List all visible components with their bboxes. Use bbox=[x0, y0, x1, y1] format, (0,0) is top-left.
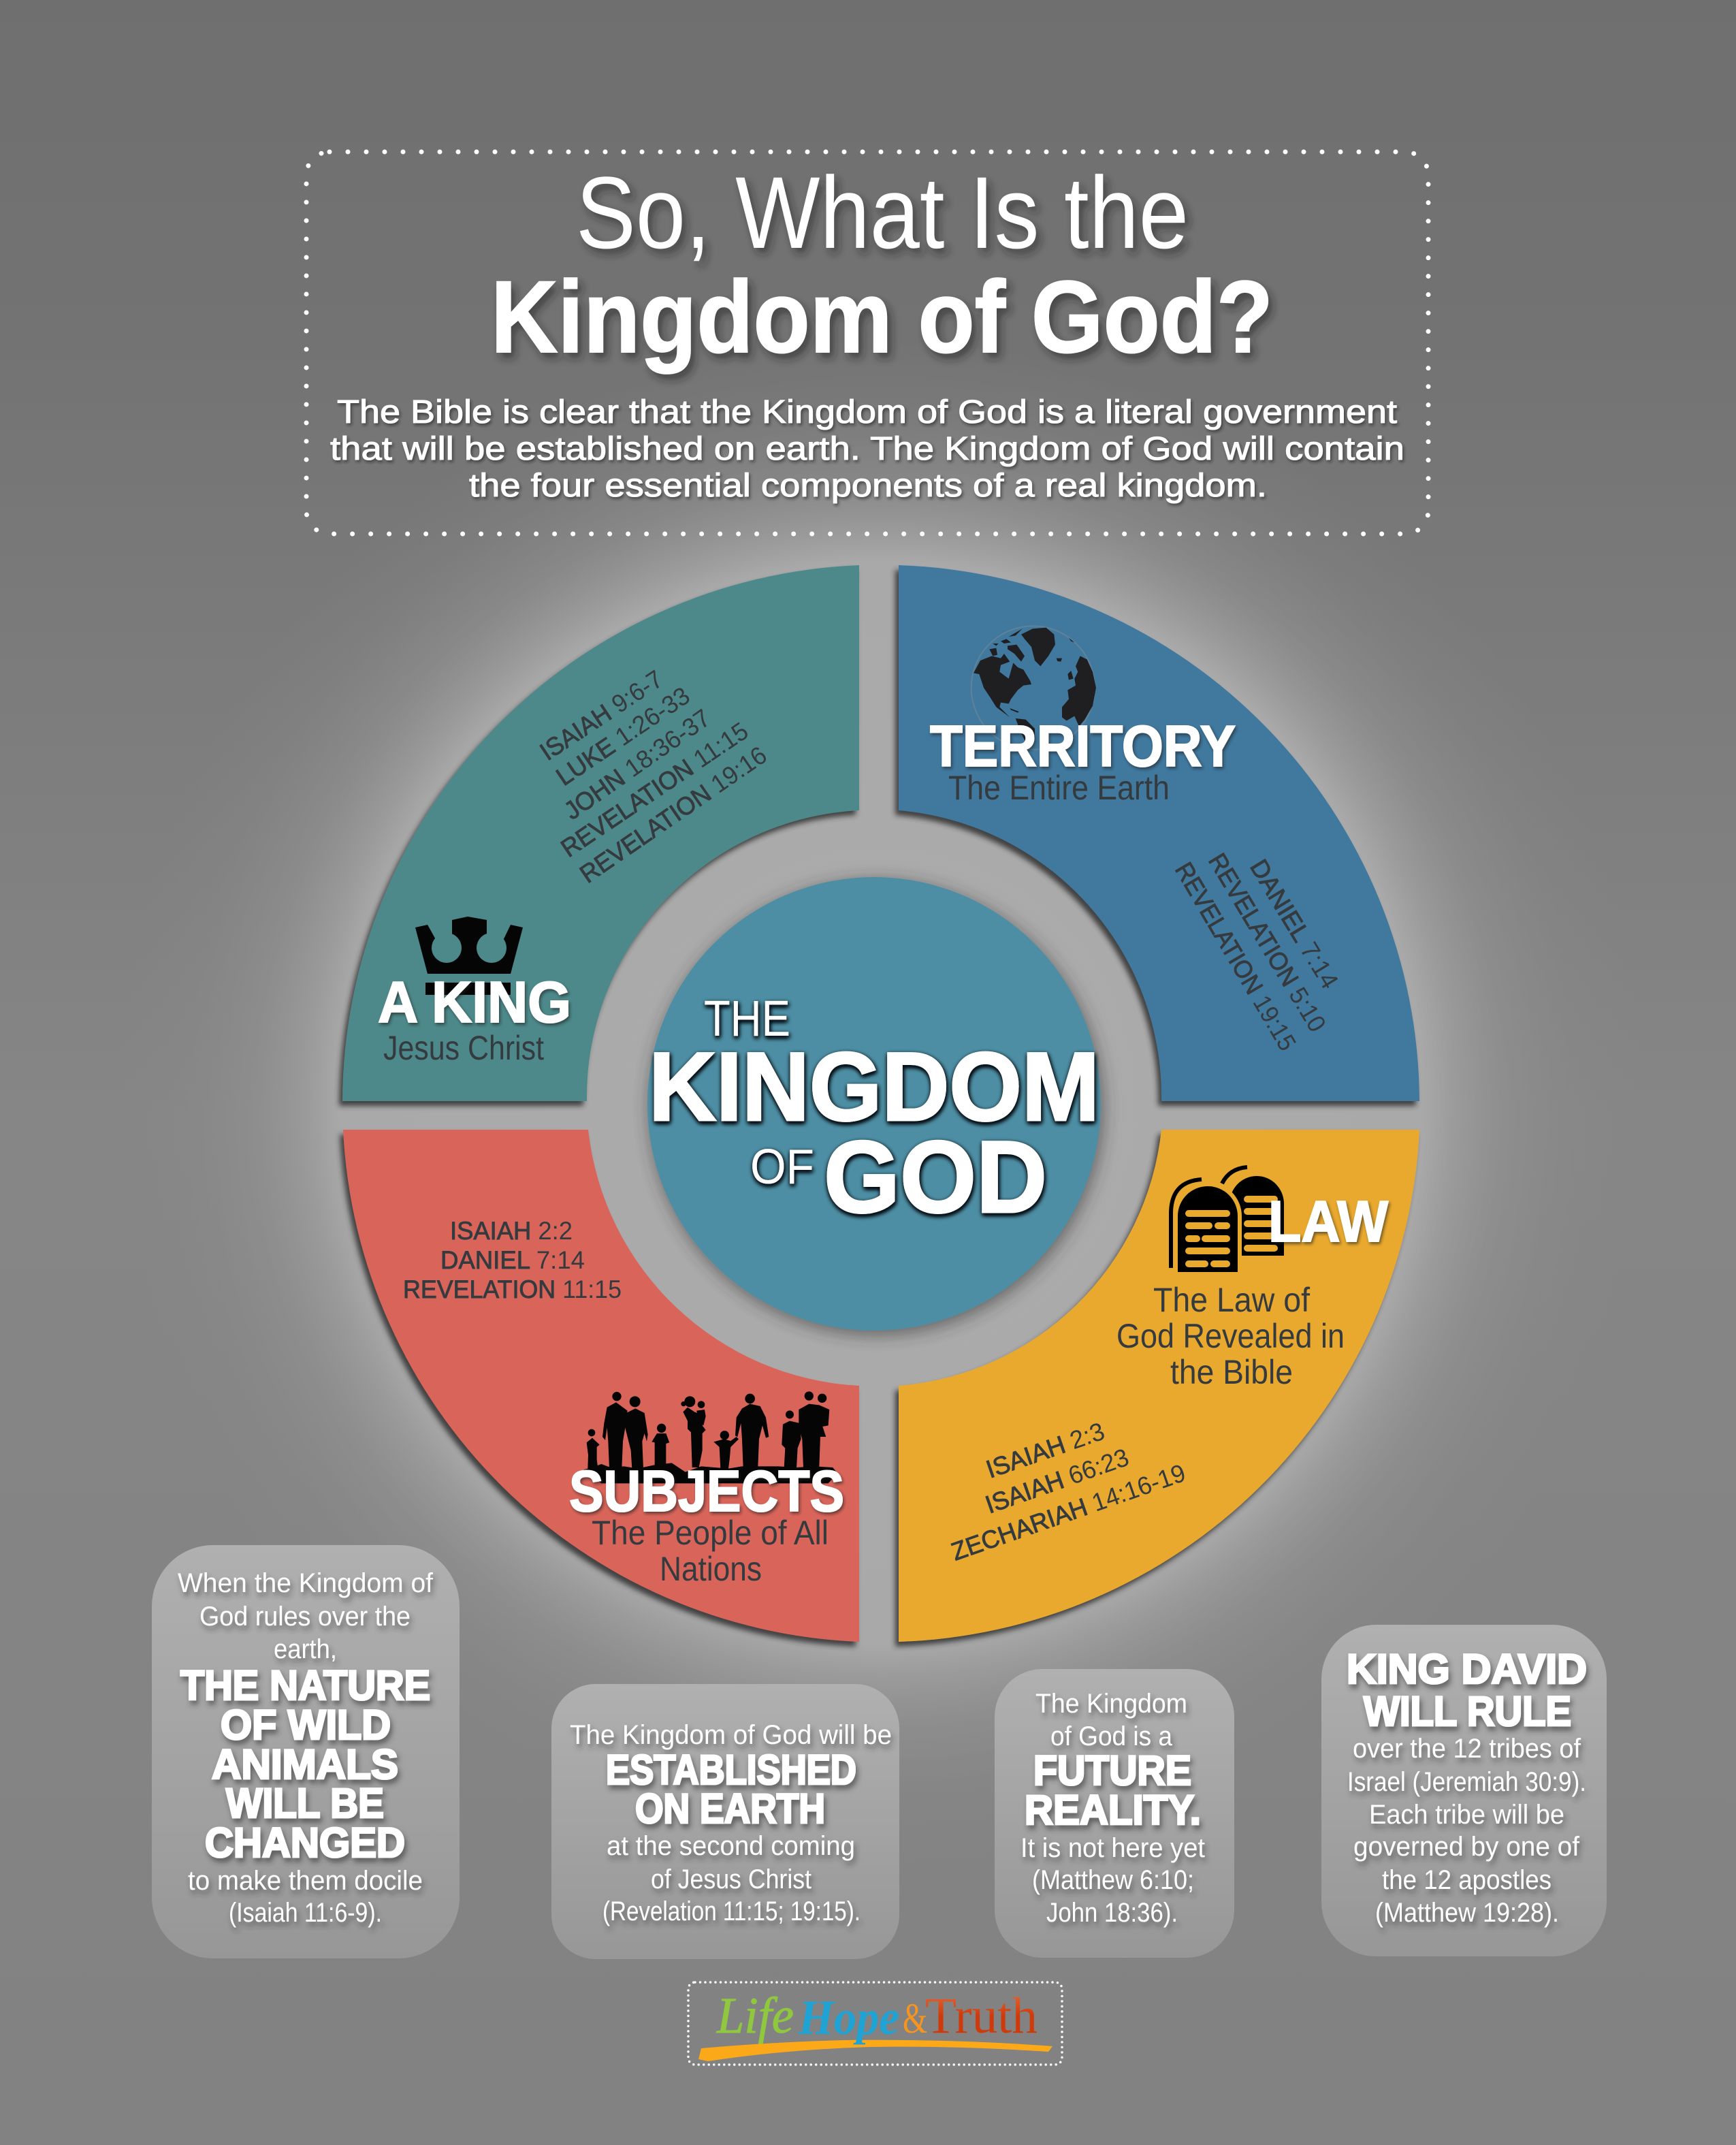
callout: king david bbox=[1321, 1625, 1607, 1956]
gold quadrant bbox=[899, 1130, 1419, 1642]
callout text: THE NATURE bbox=[180, 1662, 430, 1709]
callout text: governed by one of bbox=[1353, 1832, 1580, 1862]
callout text: Israel (Jeremiah 30:9). bbox=[1347, 1767, 1586, 1797]
intro text: that will be established on earth. The Kingdom of God will contain bbox=[330, 431, 1404, 467]
dotted frame bbox=[306, 152, 1428, 534]
icon: crown bbox=[415, 917, 523, 995]
callout text: the 12 apostles bbox=[1382, 1865, 1552, 1895]
scripture references: territory: REVELATION 19:15 bbox=[1170, 857, 1302, 1055]
callout text: God rules over the bbox=[199, 1602, 411, 1632]
callout text: (Revelation 11:15; 19:15). bbox=[602, 1896, 861, 1926]
scripture references: subjects: DANIEL 7:14 bbox=[440, 1246, 585, 1274]
callout text: earth, bbox=[274, 1634, 337, 1664]
scripture references: law: ISAIAH 66:23 bbox=[982, 1443, 1132, 1519]
callout text: FUTURE bbox=[1033, 1747, 1191, 1794]
callout text: It is not here yet bbox=[1020, 1833, 1205, 1863]
subheading: jesus christ: Jesus Christ bbox=[383, 1029, 544, 1067]
callout text bbox=[178, 1568, 434, 1928]
callout text: to make them docile bbox=[188, 1866, 423, 1896]
subheading: the people of all nations: The People of All bbox=[592, 1514, 829, 1552]
brush stroke bbox=[698, 2040, 1052, 2061]
scripture references: law: ZECHARIAH 14:16-19 bbox=[948, 1459, 1189, 1566]
callout text: Each tribe will be bbox=[1369, 1800, 1564, 1830]
center disc bbox=[647, 877, 1101, 1331]
callout: established on earth bbox=[551, 1684, 899, 1959]
callout text: (Matthew 6:10; bbox=[1032, 1865, 1194, 1895]
heading: territory: TERRITORY bbox=[930, 714, 1236, 779]
callout text: The Kingdom of God will be bbox=[570, 1720, 892, 1750]
callout text: at the second coming bbox=[607, 1831, 855, 1861]
callout text: ESTABLISHED bbox=[606, 1747, 856, 1793]
center title: GOD bbox=[824, 1119, 1047, 1234]
scripture references: subjects: REVELATION 11:15 bbox=[403, 1275, 622, 1303]
subheading: the law of god: God Revealed in bbox=[1116, 1317, 1345, 1355]
intro text: the four essential components of a real kingdom. bbox=[469, 468, 1267, 504]
scripture references: king bbox=[535, 665, 772, 889]
callout text: KING DAVID bbox=[1347, 1646, 1587, 1692]
callout background bbox=[551, 1684, 899, 1959]
teal quadrant bbox=[342, 565, 859, 1101]
scripture references: king: REVELATION 19:16 bbox=[575, 741, 772, 889]
callout text: When the Kingdom of bbox=[178, 1568, 434, 1598]
callout: future reality bbox=[995, 1669, 1234, 1958]
callout text bbox=[570, 1720, 892, 1926]
heading: law: LAW bbox=[1268, 1190, 1389, 1254]
wordmark: Life bbox=[716, 1988, 794, 2044]
scripture references: subjects: ISAIAH 2:2 bbox=[450, 1217, 573, 1245]
callout text: CHANGED bbox=[205, 1820, 405, 1866]
callout text: over the 12 tribes of bbox=[1353, 1734, 1581, 1764]
callout background bbox=[1321, 1625, 1607, 1956]
scripture references: territory: DANIEL 7:14 bbox=[1244, 855, 1344, 994]
icon: globe bbox=[971, 626, 1096, 750]
logo: life hope and truth bbox=[688, 1982, 1062, 2065]
callout text: WILL BE bbox=[226, 1780, 384, 1826]
callout background bbox=[995, 1669, 1234, 1958]
scripture references: subjects bbox=[403, 1217, 622, 1303]
scripture references: king: ISAIAH 9:6-7 bbox=[535, 665, 668, 766]
scripture references: king: JOHN 18:36-37 bbox=[559, 703, 716, 825]
panel: territory bbox=[899, 565, 1419, 1101]
callout text: OF WILD bbox=[221, 1702, 391, 1748]
title bbox=[491, 155, 1273, 374]
wordmark: Truth bbox=[925, 1988, 1038, 2044]
callout: wild animals bbox=[152, 1545, 460, 1958]
scripture references: territory: REVELATION 5:10 bbox=[1203, 848, 1332, 1037]
panel: subjects bbox=[343, 1130, 859, 1642]
panel: a king bbox=[342, 565, 859, 1101]
subheading: the people of all nations: Nations bbox=[660, 1550, 762, 1588]
subheading: the law of god: the Bible bbox=[1170, 1353, 1293, 1391]
scripture references: king: REVELATION 11:15 bbox=[556, 717, 753, 863]
wordmark: & bbox=[903, 1996, 927, 2042]
header panel bbox=[306, 152, 1428, 534]
blue quadrant bbox=[899, 565, 1419, 1101]
panel: law bbox=[899, 1130, 1419, 1642]
subheading: the entire earth: The Entire Earth bbox=[948, 769, 1170, 807]
callout text: of Jesus Christ bbox=[651, 1864, 811, 1894]
center title bbox=[649, 990, 1099, 1234]
dotted frame bbox=[688, 1982, 1062, 2065]
icon: stone tablets bbox=[1171, 1167, 1284, 1273]
callout text bbox=[1347, 1646, 1587, 1928]
icon: people silhouettes bbox=[583, 1391, 837, 1483]
subheading: the law of god: The Law of bbox=[1153, 1281, 1310, 1319]
wordmark: Hope bbox=[798, 1990, 899, 2045]
center title: OF bbox=[750, 1140, 814, 1194]
callout text bbox=[1020, 1689, 1205, 1928]
callout text: ON EARTH bbox=[635, 1785, 825, 1832]
callout text: (Matthew 19:28). bbox=[1375, 1898, 1559, 1928]
callout text: John 18:36). bbox=[1046, 1898, 1178, 1928]
intro text: The Bible is clear that the Kingdom of God is a literal government bbox=[337, 394, 1397, 430]
scripture references: king: LUKE 1:26-33 bbox=[551, 682, 695, 791]
callout background bbox=[152, 1545, 460, 1958]
heading: a king: A KING bbox=[378, 970, 571, 1035]
callout text: REALITY. bbox=[1025, 1787, 1201, 1833]
heading: subjects: SUBJECTS bbox=[569, 1459, 844, 1524]
intro text bbox=[330, 394, 1404, 504]
center title: KINGDOM bbox=[649, 1033, 1099, 1141]
callout text: of God is a bbox=[1050, 1721, 1173, 1751]
callout text: WILL RULE bbox=[1364, 1688, 1571, 1734]
callout text: The Kingdom bbox=[1035, 1689, 1187, 1719]
scripture references: law: ISAIAH 2:3 bbox=[982, 1417, 1108, 1484]
panel: center circle bbox=[647, 877, 1101, 1331]
red quadrant bbox=[343, 1130, 859, 1642]
subheading: the people of all nations bbox=[592, 1514, 829, 1588]
center title: THE bbox=[704, 990, 790, 1047]
title: So, What Is the bbox=[576, 155, 1189, 270]
title: Kingdom of God? bbox=[491, 259, 1273, 374]
callout text: ANIMALS bbox=[212, 1741, 398, 1788]
subheading: the law of god bbox=[1116, 1281, 1345, 1391]
callout text: (Isaiah 11:6-9). bbox=[229, 1898, 382, 1928]
wordmark bbox=[716, 1988, 1038, 2045]
